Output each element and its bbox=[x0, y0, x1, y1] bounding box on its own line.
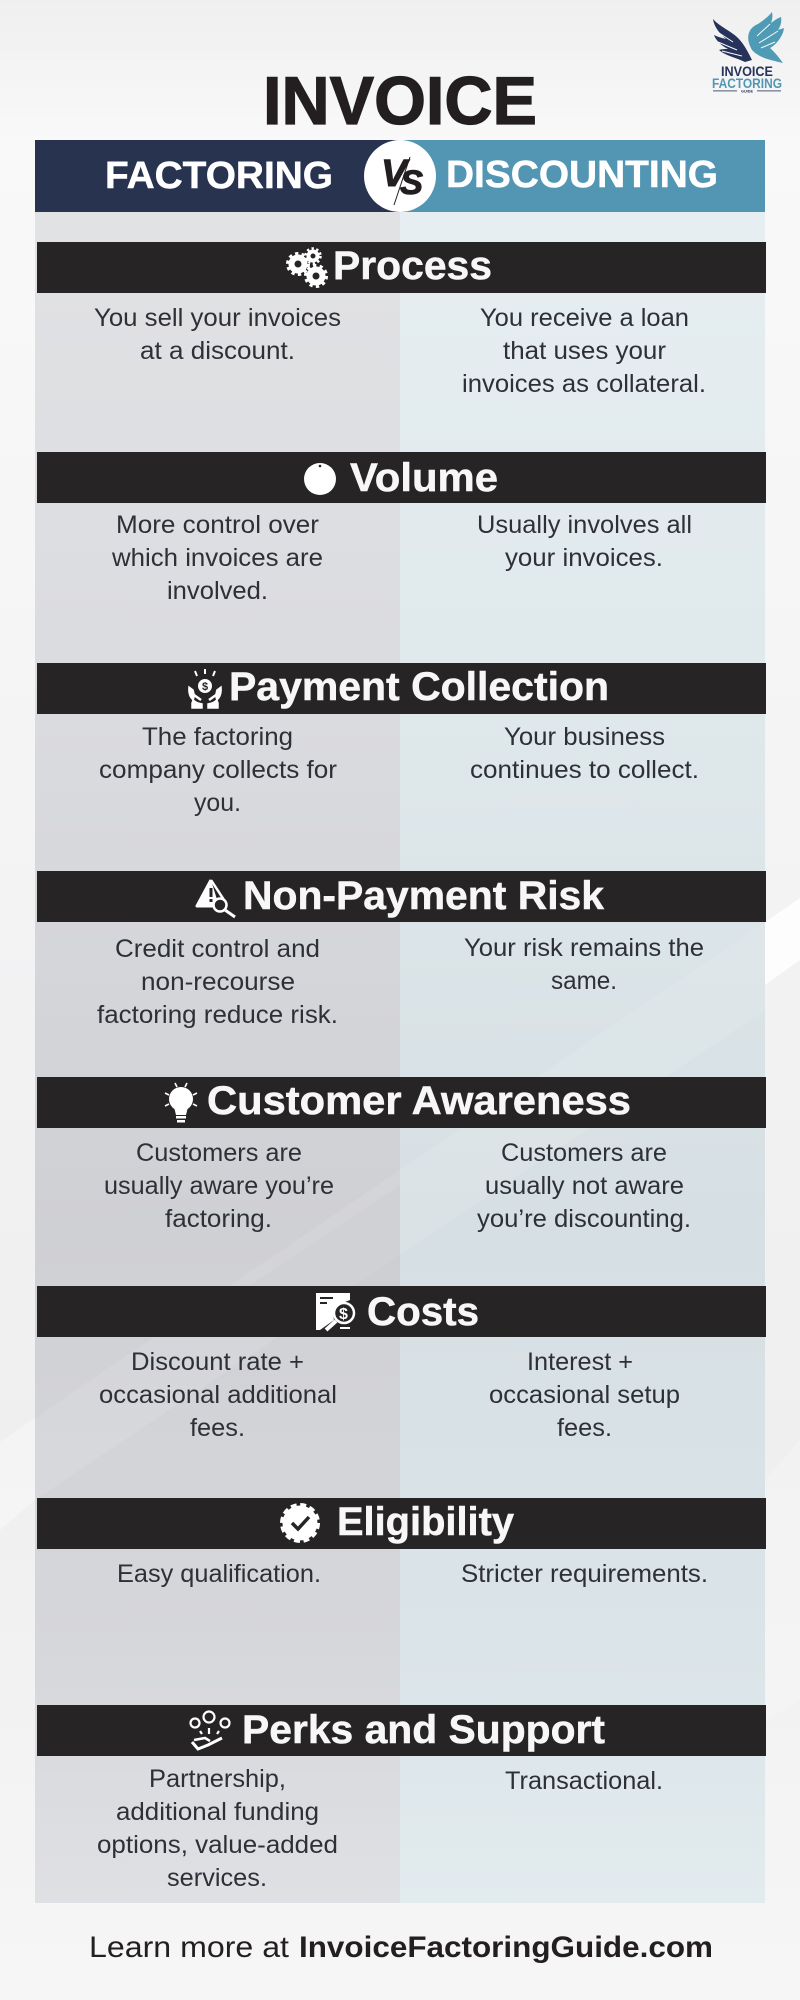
text: factoring: company collects for bbox=[99, 756, 337, 784]
logo bbox=[712, 12, 784, 94]
title: INVOICE bbox=[263, 63, 537, 139]
text: factoring: you. bbox=[194, 789, 241, 817]
text: factoring: Customers are bbox=[136, 1139, 302, 1167]
text: factoring: factoring. bbox=[165, 1205, 272, 1233]
heading: factoring: FACTORING bbox=[105, 155, 333, 197]
heading: Payment Collection bbox=[229, 665, 609, 709]
panel: perks and support bbox=[37, 1705, 766, 1892]
panel: customer awareness bbox=[37, 1077, 766, 1233]
text: factoring: Partnership, bbox=[149, 1765, 286, 1793]
text: discounting: occasional setup bbox=[489, 1381, 680, 1409]
text: factoring: You sell your invoices bbox=[94, 304, 341, 332]
comparison header bbox=[35, 140, 765, 212]
icon: circle bbox=[304, 463, 336, 495]
heading: Perks and Support bbox=[242, 1708, 605, 1752]
heading: Costs bbox=[367, 1290, 479, 1334]
icon: vs badge bbox=[364, 140, 436, 212]
text: factoring bbox=[97, 1765, 338, 1892]
icon: document and magnifier: $ bbox=[339, 1306, 348, 1323]
text: discounting: Usually involves all bbox=[477, 511, 692, 539]
text: factoring: services. bbox=[167, 1864, 267, 1892]
heading: discounting: DISCOUNTING bbox=[446, 154, 718, 196]
panel: eligibility bbox=[37, 1498, 766, 1588]
text: factoring: usually aware you’re bbox=[104, 1172, 334, 1200]
text: discounting bbox=[470, 723, 699, 784]
heading: Eligibility bbox=[337, 1500, 515, 1544]
text: factoring: More control over bbox=[116, 511, 319, 539]
text: factoring: options, value-added bbox=[97, 1831, 338, 1859]
icon: document and magnifier bbox=[316, 1293, 354, 1330]
text: factoring bbox=[99, 1348, 337, 1442]
panel: process bbox=[37, 242, 766, 398]
text: factoring bbox=[104, 1139, 334, 1233]
text: discounting bbox=[477, 511, 692, 572]
text: discounting: Your business bbox=[504, 723, 665, 751]
text: factoring: factoring reduce risk. bbox=[97, 1001, 338, 1029]
icon: hands and coin bbox=[189, 669, 221, 708]
icon: check badge bbox=[282, 1504, 318, 1542]
footer call to action: InvoiceFactoringGuide.com bbox=[299, 1931, 713, 1964]
text: discounting bbox=[464, 934, 704, 995]
icon: vs badge: V bbox=[381, 153, 410, 195]
text: factoring: occasional additional bbox=[99, 1381, 337, 1409]
text: discounting: fees. bbox=[557, 1414, 612, 1442]
text: discounting: you’re discounting. bbox=[477, 1205, 691, 1233]
icon: vs badge: S bbox=[400, 164, 423, 202]
text: discounting: invoices as collateral. bbox=[462, 370, 706, 398]
heading: Volume bbox=[350, 456, 498, 500]
text: discounting: Stricter requirements. bbox=[461, 1560, 708, 1588]
comparison columns bbox=[35, 212, 765, 1903]
text: discounting: same. bbox=[551, 967, 617, 995]
text: discounting bbox=[462, 304, 706, 398]
text: discounting bbox=[477, 1139, 691, 1233]
text: discounting: your invoices. bbox=[505, 544, 663, 572]
panel: volume bbox=[37, 452, 766, 605]
icon: light bulb bbox=[165, 1083, 197, 1122]
text: discounting: continues to collect. bbox=[470, 756, 699, 784]
text: discounting: Transactional. bbox=[505, 1767, 663, 1795]
panel: costs bbox=[37, 1286, 766, 1442]
text: factoring: Easy qualification. bbox=[117, 1560, 321, 1588]
text: factoring: additional funding bbox=[116, 1798, 319, 1826]
text: discounting: that uses your bbox=[503, 337, 666, 365]
text: discounting: usually not aware bbox=[485, 1172, 684, 1200]
panel: non-payment risk bbox=[37, 871, 766, 1029]
text: discounting bbox=[489, 1348, 680, 1442]
text: factoring: at a discount. bbox=[140, 337, 295, 365]
heading: Process bbox=[333, 244, 492, 288]
text: factoring: Discount rate + bbox=[131, 1348, 304, 1376]
logo: FACTORING bbox=[712, 75, 782, 91]
heading: Non-Payment Risk bbox=[243, 874, 605, 918]
text: factoring bbox=[94, 304, 341, 365]
logo: GUIDE bbox=[741, 88, 753, 94]
text: factoring: The factoring bbox=[142, 723, 293, 751]
icon: teal wing bbox=[748, 12, 784, 63]
text: factoring bbox=[99, 723, 337, 817]
panel: payment collection bbox=[37, 663, 766, 817]
footer call to action: Learn more at bbox=[89, 1931, 290, 1964]
text: discounting: Customers are bbox=[501, 1139, 667, 1167]
text: factoring: involved. bbox=[167, 577, 268, 605]
icon: gears bbox=[288, 248, 326, 286]
text: factoring: Credit control and bbox=[115, 935, 320, 963]
heading: Customer Awareness bbox=[207, 1079, 631, 1123]
text: factoring bbox=[97, 935, 338, 1029]
logo wordmark: INVOICE bbox=[721, 64, 773, 79]
text: discounting: Your risk remains the bbox=[464, 934, 704, 962]
icon: hand and coins bbox=[190, 1712, 230, 1749]
footer call to action bbox=[89, 1931, 713, 1964]
text: factoring bbox=[111, 511, 323, 605]
text: discounting: You receive a loan bbox=[480, 304, 689, 332]
text: factoring: fees. bbox=[190, 1414, 245, 1442]
icon: dark wing bbox=[713, 19, 752, 62]
text: discounting: Interest + bbox=[527, 1348, 633, 1376]
text: factoring: non-recourse bbox=[141, 968, 295, 996]
icon: warning and magnifier bbox=[197, 880, 235, 917]
icon: hands and coin: $ bbox=[202, 681, 208, 693]
text: factoring: which invoices are bbox=[111, 544, 323, 572]
